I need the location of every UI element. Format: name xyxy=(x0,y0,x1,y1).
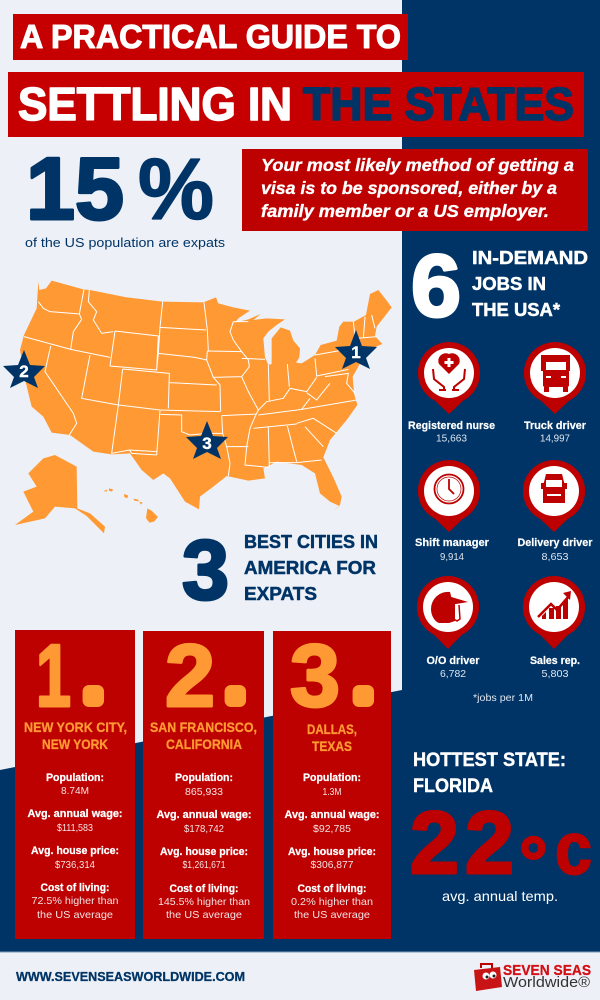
big numeral 3: . xyxy=(355,646,372,714)
job: O/O driver: 6,782 xyxy=(440,668,466,680)
job: delivery driver xyxy=(518,460,593,563)
icon: heart in hands xyxy=(433,353,465,390)
card 3: Dallas: Avg. annual wage: xyxy=(284,809,380,821)
big numeral 2: 2 xyxy=(165,626,215,725)
job: O/O driver: O/O driver xyxy=(426,655,480,667)
stat: 15 percent expats: % xyxy=(138,142,214,238)
big numeral 1: . xyxy=(85,646,102,714)
icon: suitcase xyxy=(474,964,502,991)
card 3: Dallas: Population: xyxy=(303,772,361,784)
job: delivery driver: Delivery driver xyxy=(518,537,593,549)
card 1: New York City: $111,583 xyxy=(57,822,93,834)
card 1: New York City: NEW YORK CITY, xyxy=(24,719,127,735)
card 3: Dallas: TEXAS xyxy=(312,738,352,754)
heading: 3 best cities: AMERICA FOR xyxy=(244,557,376,578)
stat: 15 percent expats: 15 xyxy=(26,139,124,238)
heading: 6 in-demand jobs: IN-DEMAND xyxy=(472,247,588,268)
title line 2: SETTLING IN xyxy=(18,78,292,130)
star marker 1: New York xyxy=(335,330,377,369)
job: registered nurse: 15,663 xyxy=(436,432,467,444)
hottest state panel: 22 xyxy=(410,793,514,892)
card 1: New York City: NEW YORK xyxy=(42,736,108,752)
heading: 3 best cities: EXPATS xyxy=(244,583,317,604)
logo: Seven Seas Worldwide xyxy=(474,963,591,991)
job: shift manager: 9,914 xyxy=(440,551,464,563)
title line 2: THE STATES xyxy=(303,78,574,130)
job: shift manager xyxy=(415,460,490,563)
title line 2 xyxy=(8,72,584,137)
card 1: New York City: $736,314 xyxy=(55,859,95,871)
big numeral 2 xyxy=(165,626,244,725)
card 1: New York City: Cost of living: xyxy=(40,882,110,894)
logo: Seven Seas Worldwide: Worldwide® xyxy=(503,975,590,991)
map of the USA with city stars xyxy=(3,281,392,533)
star marker 3: Dallas: 3 xyxy=(202,434,212,453)
card 2: San Francisco: $1,261,671 xyxy=(182,859,226,871)
job: registered nurse xyxy=(408,342,495,444)
card 3: Dallas xyxy=(273,626,391,939)
star marker 2: San Francisco xyxy=(3,350,45,388)
card 3: Dallas: $92,785 xyxy=(313,823,351,835)
card 1: New York City: 72.5% higher than xyxy=(32,895,119,907)
big numeral 1: 1 xyxy=(36,626,71,725)
stat: 15 percent expats: of the US population are expats xyxy=(25,235,226,250)
heading: 6 in-demand jobs: JOBS IN xyxy=(472,273,546,294)
card 3: Dallas: Cost of living: xyxy=(298,883,366,895)
hottest state panel: ° xyxy=(519,823,548,903)
job: shift manager: Shift manager xyxy=(415,537,490,549)
heading: 3 best cities: BEST CITIES IN xyxy=(244,531,378,552)
heading: 6 in-demand jobs xyxy=(411,236,588,335)
hottest state panel xyxy=(410,750,592,904)
card 3: Dallas: Avg. house price: xyxy=(288,846,376,858)
card 3: Dallas: 0.2% higher than xyxy=(291,896,373,908)
card 2: San Francisco: SAN FRANCISCO, xyxy=(150,719,257,735)
icon: rising chart xyxy=(538,591,571,619)
star marker 2: San Francisco: 2 xyxy=(19,362,29,381)
card 3: Dallas: 1.3M xyxy=(322,786,342,798)
job: truck driver: 14,997 xyxy=(540,432,570,444)
card 1: New York City: 8.74M xyxy=(61,785,89,797)
card 2: San Francisco: Avg. annual wage: xyxy=(156,809,252,821)
job: sales rep: 5,803 xyxy=(542,668,569,680)
big numeral 3: 3 xyxy=(290,626,340,725)
big numeral 2: . xyxy=(227,646,244,714)
job: truck driver: Truck driver xyxy=(524,420,587,432)
star marker 1: New York: 1 xyxy=(351,343,361,362)
star marker 3: Dallas xyxy=(186,421,228,459)
heading: 3 best cities: 3 xyxy=(182,523,229,617)
card 1: New York City xyxy=(15,626,135,939)
card 2: San Francisco: Cost of living: xyxy=(170,883,238,895)
callout: visa: Your most likely method of getting a xyxy=(261,155,574,175)
hottest state panel: avg. annual temp. xyxy=(442,888,558,904)
card 3: Dallas: $306,877 xyxy=(310,859,354,871)
icon: helmet xyxy=(431,592,468,623)
job: registered nurse: Registered nurse xyxy=(408,420,495,432)
job: delivery driver: 8,653 xyxy=(542,551,569,563)
card 2: San Francisco: 145.5% higher than xyxy=(158,896,250,908)
heading: 3 best cities xyxy=(182,523,378,617)
card 2: San Francisco: 865,933 xyxy=(185,786,223,798)
callout: visa xyxy=(242,149,588,231)
card 1: New York City: Population: xyxy=(46,772,104,784)
card 1: New York City: Avg. annual wage: xyxy=(28,808,122,820)
card 2: San Francisco xyxy=(143,626,264,939)
card 2: San Francisco: Population: xyxy=(175,772,233,784)
stat: 15 percent expats xyxy=(25,139,226,250)
callout: visa: family member or a US employer. xyxy=(261,201,549,221)
job: truck driver xyxy=(524,342,587,444)
job: sales rep xyxy=(523,576,585,680)
title line 1: A PRACTICAL GUIDE TO xyxy=(20,18,401,55)
job: sales rep: Sales rep. xyxy=(530,655,580,667)
card 2: San Francisco: the US average xyxy=(166,909,242,921)
hottest state panel: HOTTEST STATE: xyxy=(413,750,566,771)
job: O/O driver xyxy=(417,576,480,680)
heading: 6 in-demand jobs: 6 xyxy=(411,236,461,335)
icon: truck xyxy=(541,355,570,392)
card 3: Dallas: the US average xyxy=(294,909,370,921)
card 2: San Francisco: CALIFORNIA xyxy=(166,736,242,752)
callout: visa: visa is to be sponsored, either by a xyxy=(261,178,557,198)
card 1: New York City: the US average xyxy=(37,909,113,921)
logo: Seven Seas Worldwide: SEVEN SEAS xyxy=(503,963,591,979)
footnote: *jobs per 1M xyxy=(473,692,533,704)
card 1: New York City: Avg. house price: xyxy=(31,845,119,857)
icon: semi truck xyxy=(541,474,567,503)
hottest state panel: FLORIDA xyxy=(413,776,493,797)
big numeral 3 xyxy=(290,626,372,725)
card 3: Dallas: DALLAS, xyxy=(307,721,357,737)
heading: 6 in-demand jobs: THE USA* xyxy=(472,299,561,320)
card 2: San Francisco: $178,742 xyxy=(184,823,224,835)
card 2: San Francisco: Avg. house price: xyxy=(160,846,248,858)
hottest state panel: c xyxy=(555,807,592,890)
icon: clock xyxy=(434,474,464,504)
footer url: WWW.SEVENSEASWORLDWIDE.COM xyxy=(16,969,245,984)
